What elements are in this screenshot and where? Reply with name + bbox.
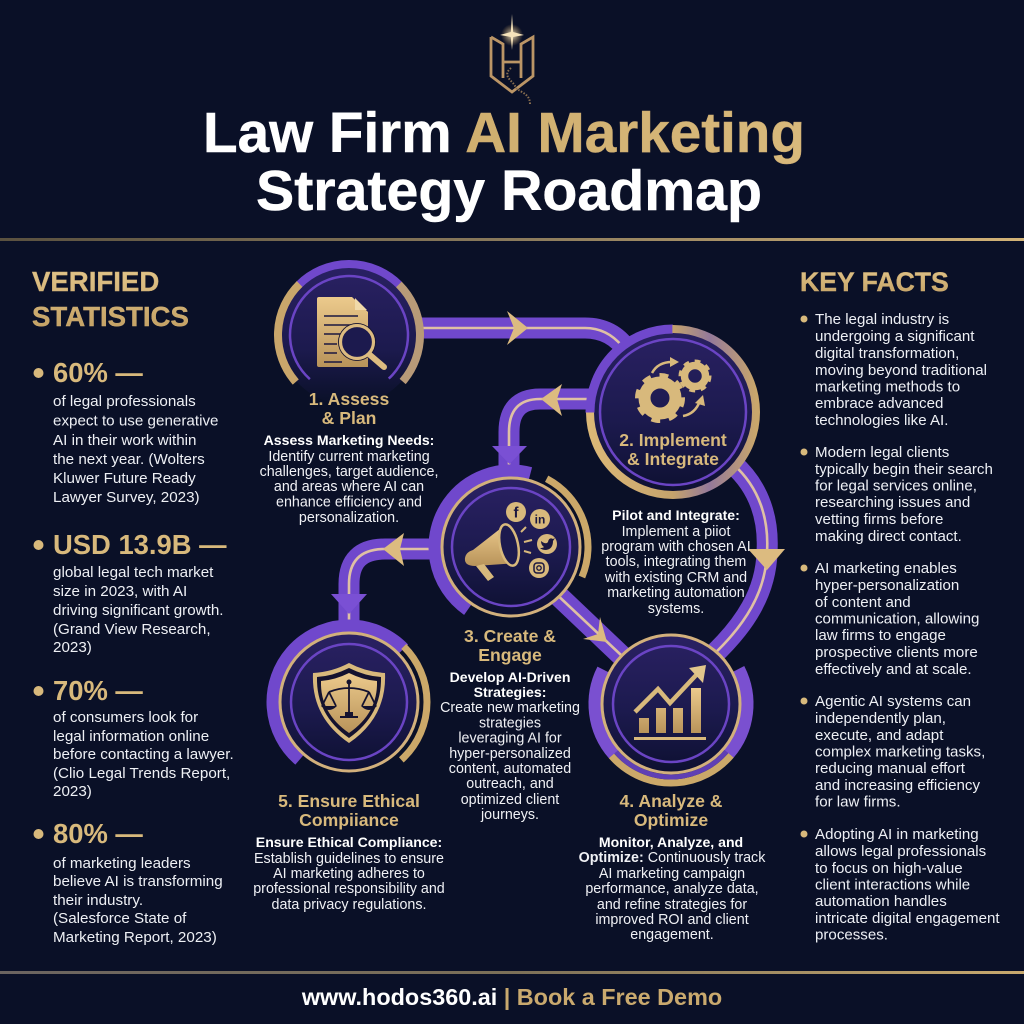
step description bbox=[579, 834, 766, 943]
fact 2 bbox=[800, 444, 993, 545]
step description: personalization. bbox=[299, 510, 399, 526]
logo: shield monogram with star bbox=[491, 14, 533, 104]
stat: 60%: Lawyer Survey, 2023) bbox=[53, 489, 200, 506]
stat: 80%: 80% — bbox=[53, 818, 143, 849]
step description: marketing automation bbox=[607, 585, 745, 601]
step description: Strategies: bbox=[474, 684, 546, 700]
step description: and areas where AI can bbox=[274, 479, 424, 495]
fact 4 bbox=[800, 693, 985, 810]
panel: key facts bbox=[800, 267, 1000, 944]
fact 4: Agentic AI systems can bbox=[815, 693, 971, 710]
step description: Assess Marketing Needs: bbox=[264, 432, 434, 448]
step 5: ensure ethical compliance bbox=[239, 592, 459, 913]
connector: step 3 to step 5 bbox=[331, 533, 441, 640]
step description bbox=[440, 669, 580, 823]
stat: 80% bbox=[34, 818, 223, 946]
title: Strategy Roadmap bbox=[256, 159, 762, 223]
stat: 60%: the next year. (Wolters bbox=[53, 451, 205, 468]
step description: challenges, target audience, bbox=[260, 464, 438, 480]
step heading: Engage bbox=[478, 645, 542, 665]
step description bbox=[260, 432, 438, 526]
fact 1: undergoing a significant bbox=[815, 328, 975, 345]
icon: gears and arrows bbox=[638, 357, 710, 420]
stat: 60%: AI in their work within bbox=[53, 432, 196, 449]
fact 3: of content and bbox=[815, 594, 911, 611]
stat: 70%: (Clio Legal Trends Report, bbox=[53, 765, 230, 782]
fact 2: vetting firms before bbox=[815, 511, 943, 528]
fact 5: to focus on high-value bbox=[815, 860, 963, 877]
step description: systems. bbox=[648, 601, 704, 617]
fact 1: embrace advanced bbox=[815, 395, 943, 412]
stat: 70%: legal information online bbox=[53, 728, 209, 745]
fact 1 bbox=[800, 311, 987, 429]
fact 2: typically begin their search bbox=[815, 461, 993, 478]
panel: verified statistics bbox=[32, 266, 234, 946]
step description: Ensure Ethical Compliance: bbox=[256, 834, 442, 850]
step description: optimized client bbox=[461, 792, 559, 808]
badge: step 2 bbox=[589, 328, 757, 496]
connector: step 2 to step 4 bbox=[712, 464, 785, 656]
stat: 70%: before contacting a lawyer. bbox=[53, 746, 234, 763]
fact 1: technologies like AI. bbox=[815, 412, 948, 429]
stat: 80%: (Salesforce State of bbox=[53, 910, 187, 927]
stat: 60% bbox=[34, 357, 218, 506]
step description: engagement. bbox=[630, 927, 714, 943]
stat: USD 13.9B: (Grand View Research, bbox=[53, 621, 211, 638]
step heading: Compiiance bbox=[299, 810, 399, 830]
fact 3: AI marketing enables bbox=[815, 560, 957, 577]
icon: rising bar chart bbox=[634, 665, 706, 740]
stat: USD 13.9B: size in 2023, with AI bbox=[53, 583, 187, 600]
stat: USD 13.9B: 2023) bbox=[53, 639, 92, 656]
step description: improved ROI and client bbox=[595, 912, 749, 928]
step description: outreach, and bbox=[466, 776, 554, 792]
fact 5: allows legal professionals bbox=[815, 843, 986, 860]
fact 1: digital transformation, bbox=[815, 345, 959, 362]
step heading: 2. Implement bbox=[619, 430, 727, 450]
step 2: implement and integrate bbox=[589, 328, 757, 617]
step description: Establish guidelines to ensure bbox=[254, 851, 444, 867]
heading: verified statistics: VERIFIED bbox=[32, 266, 159, 297]
fact 5 bbox=[800, 826, 1000, 944]
stat: 80%: believe AI is transforming bbox=[53, 873, 223, 890]
step description: strategies bbox=[479, 716, 541, 732]
badge: step 3 bbox=[405, 441, 617, 653]
step description: Implement a piiot bbox=[622, 524, 730, 540]
fact 3: law firms to engage bbox=[815, 627, 946, 644]
fact 4: execute, and adapt bbox=[815, 727, 944, 744]
step description: Pilot and Integrate: bbox=[612, 507, 740, 523]
stat: 70% bbox=[34, 675, 234, 800]
stat: 80%: Marketing Report, 2023) bbox=[53, 929, 217, 946]
fact 1: moving beyond traditional bbox=[815, 362, 987, 379]
step 4: analyze and optimize bbox=[560, 593, 782, 943]
fact 4: for law firms. bbox=[815, 794, 901, 810]
step description: Identify current marketing bbox=[268, 449, 430, 465]
step heading: & Plan bbox=[322, 408, 376, 428]
step description: tools, integrating them bbox=[606, 554, 746, 570]
stat: USD 13.9B: driving significant growth. bbox=[53, 602, 224, 619]
step description: program with chosen AI bbox=[601, 539, 751, 555]
badge: step 5 bbox=[239, 592, 459, 812]
fact 5: automation handles bbox=[815, 893, 947, 910]
heading: key facts: KEY FACTS bbox=[800, 267, 949, 297]
fact 4: and increasing efficiency bbox=[815, 777, 980, 794]
step description: data privacy regulations. bbox=[272, 897, 426, 913]
heading: verified statistics: STATISTICS bbox=[32, 301, 189, 332]
fact 3: effectively and at scale. bbox=[815, 661, 972, 678]
step description: Optimize: Continuously track bbox=[579, 850, 765, 866]
icon: document with magnifier bbox=[317, 297, 384, 367]
stat: 70%: of consumers look for bbox=[53, 709, 198, 726]
fact 4: reducing manual effort bbox=[815, 760, 966, 777]
step description: Create new marketing bbox=[440, 700, 580, 716]
badge: step 1 bbox=[249, 235, 449, 435]
icon: shield with scales of justice bbox=[313, 663, 385, 743]
step description: Monitor, Analyze, and bbox=[599, 834, 743, 850]
fact 2: researching issues and bbox=[815, 494, 970, 511]
stat: USD 13.9B: USD 13.9B — bbox=[53, 529, 227, 560]
fact 4: complex marketing tasks, bbox=[815, 744, 985, 760]
icon: megaphone with social badges bbox=[465, 502, 557, 581]
step description: enhance efficiency and bbox=[276, 494, 422, 510]
footer: www.hodos360.ai | Book a Free Demo bbox=[301, 984, 722, 1010]
step description: AI marketing adheres to bbox=[273, 866, 425, 882]
fact 2: for legal services online, bbox=[815, 478, 977, 494]
stat: 60%: 60% — bbox=[53, 357, 143, 388]
fact 3: prospective clients more bbox=[815, 644, 978, 661]
fact 3 bbox=[800, 560, 979, 678]
step description: and refine strategies for bbox=[597, 897, 747, 913]
fact 1: marketing methods to bbox=[815, 378, 960, 396]
stat: 70%: 70% — bbox=[53, 675, 143, 706]
step 1: assess and plan bbox=[249, 235, 449, 526]
step description: content, automated bbox=[449, 761, 571, 777]
step 3: create and engage bbox=[405, 441, 617, 823]
icon: megaphone with social badges: in bbox=[535, 512, 545, 526]
step description: performance, analyze data, bbox=[585, 881, 759, 897]
fact 2: Modern legal clients bbox=[815, 444, 949, 461]
fact 5: Adopting AI in marketing bbox=[815, 826, 979, 843]
stat: 60%: expect to use generative bbox=[53, 412, 218, 430]
fact 5: processes. bbox=[815, 926, 888, 944]
connector: step 2 to step 3 bbox=[492, 384, 600, 480]
stat: 60%: Kluwer Future Ready bbox=[53, 470, 196, 487]
connector: step 3 to step 4 bbox=[545, 583, 625, 659]
fact 5: intricate digital engagement bbox=[815, 910, 1000, 927]
fact 3: communication, allowing bbox=[815, 610, 979, 628]
step heading: 3. Create & bbox=[464, 626, 556, 646]
step description: professional responsibility and bbox=[253, 881, 445, 897]
fact 3: hyper-personalization bbox=[815, 577, 959, 594]
stat: 60%: of legal professionals bbox=[53, 393, 196, 410]
fact 1: The legal industry is bbox=[815, 311, 949, 328]
title bbox=[203, 101, 805, 223]
title: Law Firm AI Marketing bbox=[203, 101, 805, 165]
step heading: & Integrate bbox=[627, 449, 719, 469]
fact 5: client interactions while bbox=[815, 876, 970, 894]
step description: with existing CRM and bbox=[604, 570, 747, 586]
step description: Develop AI-Driven bbox=[450, 669, 570, 685]
connector: step 1 to step 2 bbox=[415, 311, 627, 350]
step description: journeys. bbox=[480, 807, 539, 823]
icon: megaphone with social badges: f bbox=[514, 504, 520, 522]
step description bbox=[253, 834, 445, 913]
step heading: 1. Assess bbox=[309, 389, 389, 409]
badge: step 4 bbox=[560, 593, 782, 815]
step heading: 5. Ensure Ethical bbox=[278, 791, 420, 811]
stat: 80%: their industry. bbox=[53, 892, 143, 909]
fact 2: making direct contact. bbox=[815, 528, 962, 545]
step description: AI marketing campaign bbox=[599, 866, 745, 882]
stat: USD 13.9B bbox=[34, 529, 227, 656]
step description: hyper-personalized bbox=[449, 746, 571, 762]
step heading: 4. Analyze & bbox=[620, 791, 723, 811]
stat: 70%: 2023) bbox=[53, 783, 92, 800]
stat: USD 13.9B: global legal tech market bbox=[53, 564, 214, 581]
step description bbox=[601, 507, 751, 617]
step description: leveraging AI for bbox=[458, 730, 562, 746]
step heading: Optimize bbox=[634, 810, 708, 830]
stat: 80%: of marketing leaders bbox=[53, 855, 191, 872]
fact 4: independently plan, bbox=[815, 710, 946, 727]
